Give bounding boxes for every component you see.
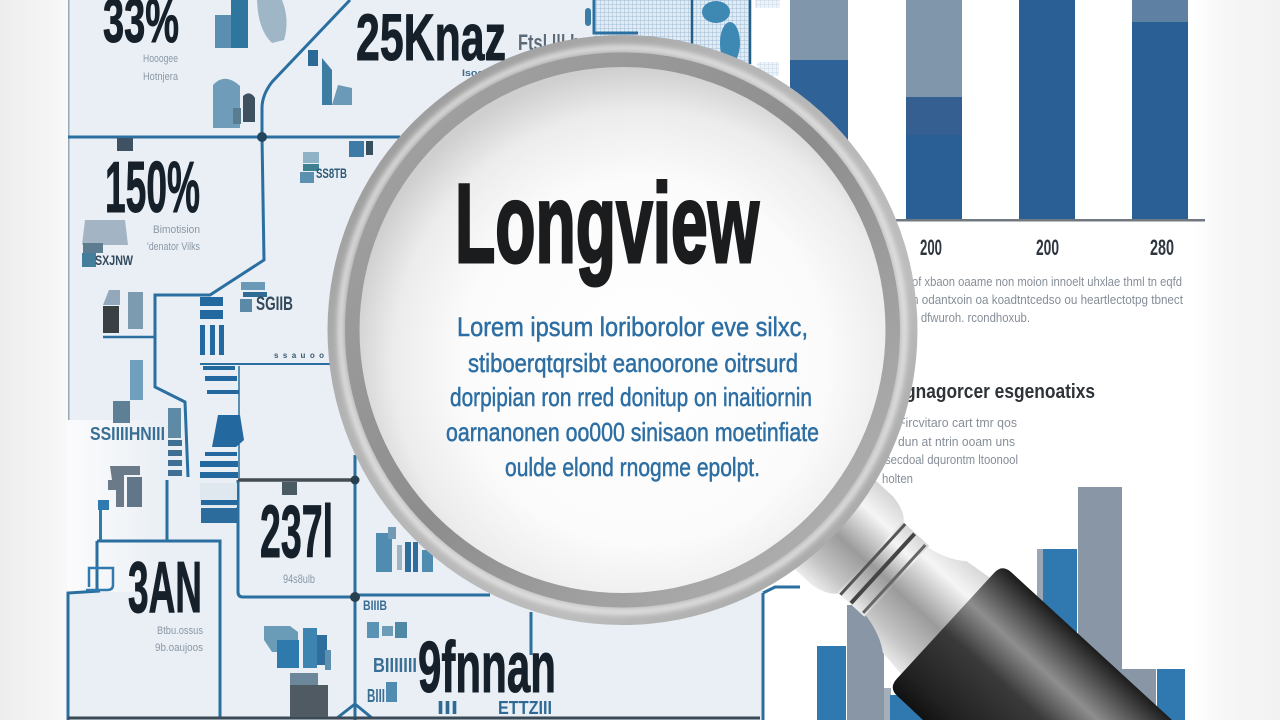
map micro labels: SGIIB <box>256 294 293 315</box>
text block: secondary description: Fircvitaro cart tmr qos <box>898 415 1017 430</box>
panel: stat 237l <box>260 490 333 586</box>
map micro labels: BIII <box>367 686 385 706</box>
text block: secondary description: holten <box>882 471 913 486</box>
map micro labels: SSIIIIHNIII <box>90 424 165 444</box>
map roads <box>68 0 800 720</box>
panel: stat 3AN: 3AN <box>128 548 202 628</box>
chart year labels: 200 <box>1036 235 1059 260</box>
panel: stat 237l: 237l <box>260 490 333 573</box>
magnifier collar <box>784 471 993 677</box>
heading: secondary section: gnagorcer esgenoatixs <box>905 381 1095 403</box>
panel: percentage stat 33%: Hotnjera <box>143 71 179 83</box>
text block: lens body copy: Lorem ipsum loriborolor eve silxc, <box>457 312 808 342</box>
text block: chart description: of xbaon oaame non moion innoelt uhxlae thml tn eqfd <box>912 274 1182 289</box>
chart year labels: 200 <box>920 235 942 260</box>
panel: percentage stat 150%: Bimotision <box>153 224 200 236</box>
panel: percentage stat 150%: 'denator Vilks <box>147 241 200 253</box>
text block: lens body copy: dorpipian ron rred donitup on inaitiornin <box>450 382 812 412</box>
map micro labels: SS8TB <box>316 165 347 181</box>
chart year labels: 280 <box>1150 235 1174 260</box>
panel: city map background <box>68 0 762 720</box>
map micro labels: ssauoo <box>274 351 324 360</box>
chart year labels <box>920 235 1174 260</box>
map micro labels: Fts| ||| b <box>518 30 580 55</box>
text block: chart description: n odantxoin oa koadtntcedso ou heartlectotpg tbnect <box>912 292 1183 307</box>
magnifier handle <box>893 568 1172 720</box>
title: Longview: Longview <box>455 161 760 286</box>
icon: building clusters <box>82 0 433 717</box>
bar chart: top right stacked bars <box>790 0 1205 222</box>
map micro labels <box>90 30 580 718</box>
map micro labels: ETTZIII <box>498 698 552 718</box>
text block: lens body copy: oulde elond rnogme epolpt. <box>505 452 760 482</box>
icon: halftone grid panel at top <box>585 0 780 76</box>
panel: percentage stat 150% <box>105 148 200 253</box>
text block: secondary description <box>882 415 1018 486</box>
magnifier ring <box>328 35 918 625</box>
icon: magnifying glass <box>328 35 1172 720</box>
panel: stat 9fnnan: 9fnnan <box>418 628 556 708</box>
text block: lens body copy <box>446 312 819 482</box>
panel: percentage stat 33%: Hooogee <box>143 53 178 65</box>
map micro labels: BIIIB <box>363 597 387 613</box>
panel: stat 3AN <box>128 548 203 654</box>
map micro labels: III <box>437 698 458 718</box>
map micro labels: Isoo <box>462 68 485 78</box>
map micro labels: BIIIIIII <box>373 655 417 677</box>
text block: chart description <box>912 274 1183 325</box>
text block: lens body copy: stiboerqtqrsibt eanoorone oitrsurd <box>468 348 798 378</box>
map micro labels: SXJNW <box>95 252 134 268</box>
stripe block: striped blue map district <box>200 297 244 523</box>
panel: stat 25Knaz: 25Knaz <box>356 0 506 74</box>
text block: lens body copy: oarnanonen oo000 sinisaon moetinfiate <box>446 417 819 447</box>
panel: percentage stat 150%: 150% <box>105 148 200 228</box>
text block: secondary description: dun at ntrin ooam uns <box>898 434 1015 449</box>
magnifier lens <box>360 67 886 593</box>
panel: stat 3AN: 9b.oaujoos <box>155 642 203 654</box>
panel: stat 237l: 94s8ulb <box>283 572 315 586</box>
panel: stat 3AN: Btbu.ossus <box>157 625 203 637</box>
text block: chart description: s dfwuroh. rcondhoxub. <box>912 310 1030 325</box>
bar chart: bottom right bars <box>817 487 1185 720</box>
text block: secondary description: secdoal dqurontm ltoonool <box>885 452 1018 467</box>
panel: percentage stat 33% <box>103 0 179 83</box>
